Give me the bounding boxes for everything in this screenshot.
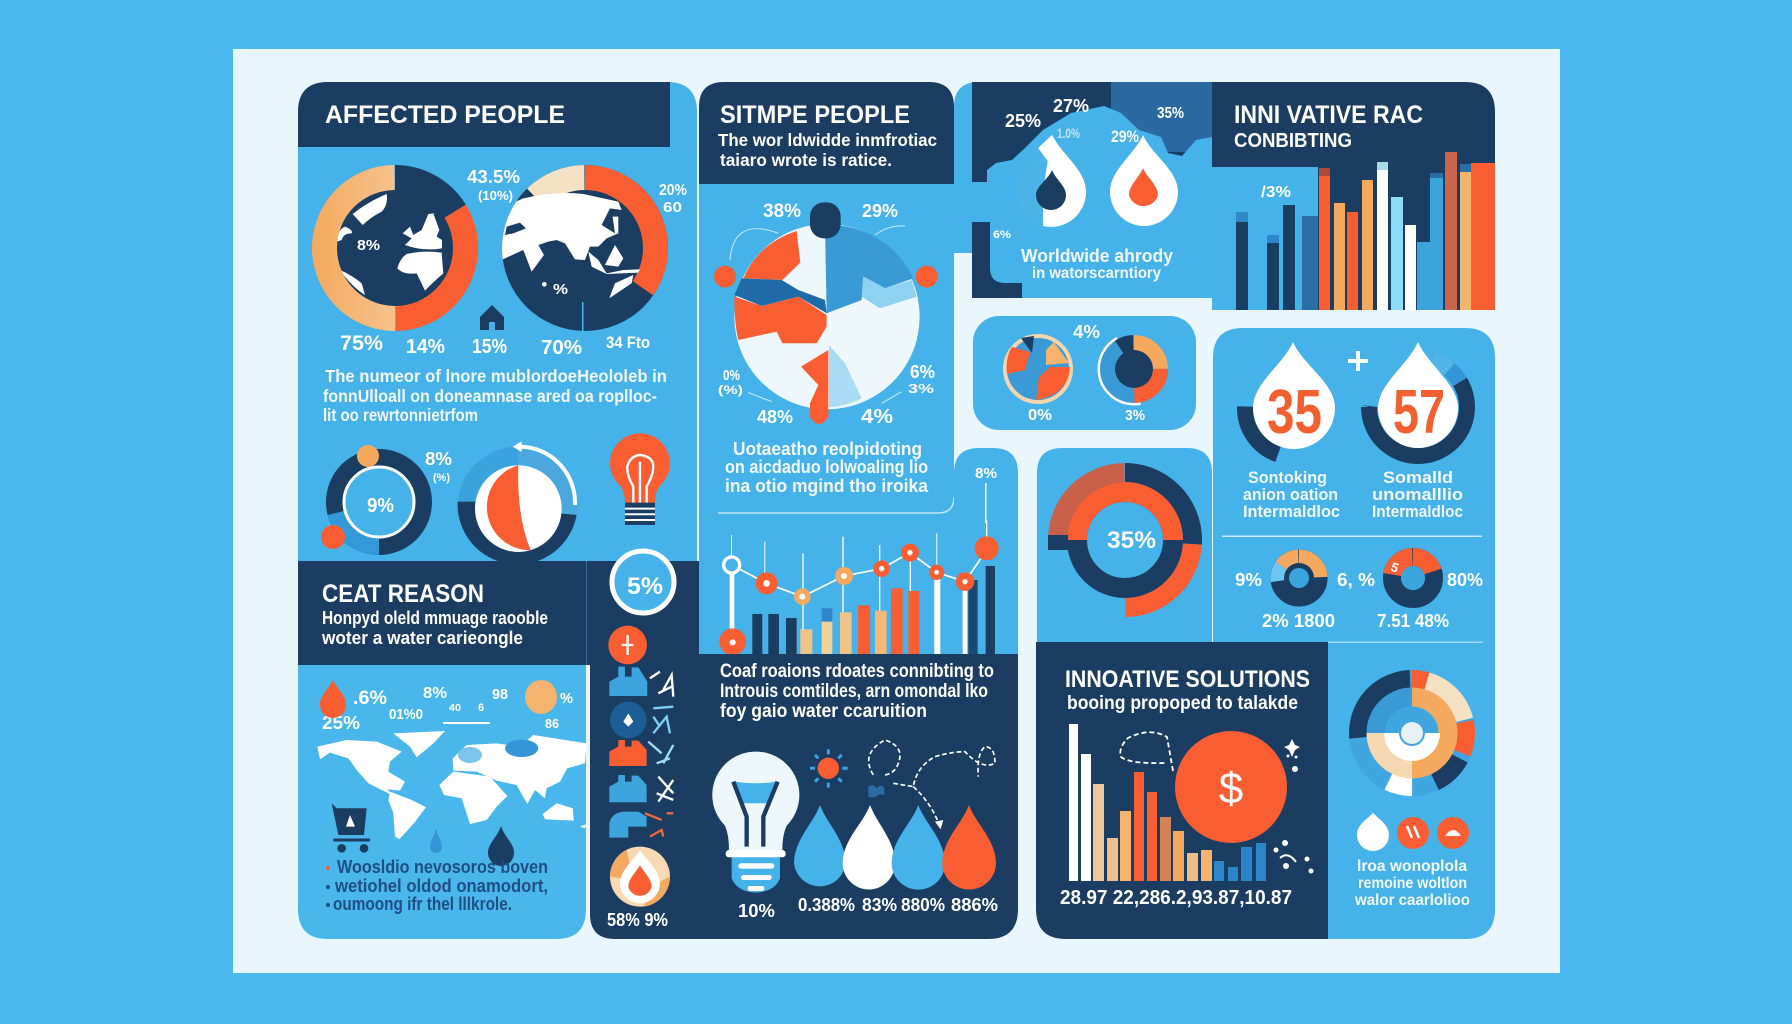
icon: small drops bbox=[430, 826, 514, 866]
labels: drop percentages: 880% bbox=[901, 895, 945, 915]
heading: ceat reason: CEAT REASON bbox=[322, 580, 484, 608]
icon: white and dark drop bbox=[1016, 135, 1088, 227]
icon: house bbox=[480, 305, 504, 330]
labels: map percentages: % bbox=[560, 690, 573, 707]
panel: simple people bbox=[699, 82, 954, 654]
labels: map percentages: 8% bbox=[423, 685, 447, 702]
stat: 57 drop: 57 bbox=[1393, 378, 1445, 447]
labels: drop percentages: 25% bbox=[1005, 111, 1041, 131]
labels: pie percentages: 48% bbox=[757, 407, 793, 427]
chart: ring donut 9%: 8% bbox=[425, 449, 452, 469]
heading: ceat reason: Honpyd oleld mmuage raooble bbox=[322, 607, 548, 628]
icon: sparkle and dots bbox=[1274, 739, 1314, 874]
text block: 57 caption: Intermaldloc bbox=[1372, 503, 1463, 521]
labels: top donut percentages: 70% bbox=[541, 337, 582, 359]
panel: two small pies bbox=[973, 316, 1196, 430]
labels: drop percentages: 35% bbox=[1157, 105, 1184, 122]
chart: small pie left bbox=[1005, 336, 1071, 402]
chart: ring donut 9% bbox=[321, 445, 452, 549]
labels: drop percentages bbox=[738, 895, 998, 921]
label: column percentages: 58% 9% bbox=[607, 910, 668, 930]
panel: tab with 8%: 8% bbox=[975, 465, 997, 482]
page background panel bbox=[233, 49, 1560, 973]
text block: solutions caption bbox=[1354, 858, 1470, 909]
text block: affected description bbox=[323, 366, 667, 425]
labels: drop percentages: 886% bbox=[951, 895, 998, 915]
labels: map percentages: 98 bbox=[492, 686, 508, 703]
stat: 35 drop bbox=[1245, 342, 1343, 457]
labels: drop percentages: 83% bbox=[862, 895, 897, 915]
labels: map percentages: 6 bbox=[478, 702, 484, 714]
labels: top donut percentages: (10%) bbox=[478, 188, 513, 203]
icons: four drops bbox=[794, 805, 996, 890]
labels: small donut values: 9% bbox=[1235, 570, 1262, 590]
icon: dollar coin: $ bbox=[1219, 764, 1243, 813]
labels: map percentages: 86 bbox=[545, 716, 559, 731]
labels: pie percentages: 29% bbox=[862, 201, 898, 221]
badge: 5% ring bbox=[612, 551, 674, 613]
text block: affected description: fonnUlloall on doneamnase ared oa roplloc- bbox=[323, 386, 657, 406]
heading: simple people: taiaro wrote is ratice. bbox=[720, 150, 892, 170]
text block: reason bullets bbox=[326, 857, 548, 914]
labels: pie percentages: 38% bbox=[763, 201, 801, 222]
heading: affected people: AFFECTED PEOPLE bbox=[325, 101, 565, 129]
labels: top donut percentages: 60 bbox=[663, 199, 682, 216]
labels: top donut percentages: 34 Fto bbox=[606, 333, 650, 352]
heading: affected people bbox=[298, 82, 670, 147]
labels: map percentages bbox=[322, 685, 573, 733]
chart: ring donut 9%: 9% bbox=[367, 495, 394, 517]
chart: ring donut 9%: (%) bbox=[433, 472, 450, 484]
labels: top donut percentages: 14% bbox=[406, 336, 445, 358]
chart: small donut right bbox=[1099, 334, 1169, 404]
panel: tab with 8% bbox=[954, 448, 1018, 654]
icon: orange drop bbox=[320, 680, 346, 718]
text block: affected description: lit oo rewrtonnietrfom bbox=[323, 405, 478, 425]
labels: top donut percentages: 15% bbox=[472, 336, 507, 358]
labels: pie percentages bbox=[718, 201, 935, 428]
labels: top donut percentages: 20% bbox=[659, 182, 687, 199]
heading: simple people: SITMPE PEOPLE bbox=[720, 101, 910, 129]
text block: contributing reasons: Introuis comtildes, arn omondal lko bbox=[720, 681, 988, 702]
text block: pie description bbox=[725, 438, 929, 496]
labels: drop percentages: 10% bbox=[738, 901, 775, 921]
stat: 35 drop: 35 bbox=[1267, 378, 1322, 447]
heading: innovative rac bbox=[1234, 101, 1423, 152]
labels: pie percentages: 3% bbox=[908, 381, 935, 396]
chart: globe donut left bbox=[324, 178, 466, 318]
text block: 35 caption: Sontoking bbox=[1248, 469, 1327, 487]
labels: small donut values: 2% 1800 bbox=[1262, 611, 1335, 631]
text block: pie description: on aicdaduo lolwoaling lio bbox=[725, 456, 928, 477]
labels: small donut values: 7.51 48% bbox=[1377, 611, 1449, 631]
chart: globe donut right bbox=[497, 165, 668, 332]
chart: small donut tan bbox=[1279, 558, 1319, 598]
labels: pie percentages: 6% bbox=[910, 362, 935, 382]
chart: 35% multi-ring donut: 35% bbox=[1107, 527, 1156, 554]
labels: small donut values: 6, % bbox=[1337, 570, 1375, 590]
panel: 35 and 57 statistics bbox=[1213, 328, 1495, 939]
chart: small donut orange bbox=[1389, 557, 1434, 599]
icon: sun and dashed arrows bbox=[810, 740, 995, 829]
labels: map percentages: 25% bbox=[322, 713, 360, 733]
text block: contributing reasons: foy gaio water ccaruition bbox=[720, 701, 927, 722]
labels: pie percentages: (%) bbox=[718, 383, 743, 397]
text block: 57 caption: Somalld bbox=[1383, 469, 1453, 487]
panel: innovative solutions bbox=[1036, 642, 1328, 939]
heading: innovative rac: CONBIBTING bbox=[1234, 130, 1352, 152]
labels: drop percentages bbox=[993, 96, 1184, 241]
labels: small pie percentages bbox=[1028, 322, 1145, 424]
icon: tan blob bbox=[525, 680, 557, 714]
text block: solutions caption: lroa wonoplola bbox=[1357, 858, 1467, 875]
text block: pie description: Uotaeatho reolpidoting bbox=[733, 438, 922, 459]
badge: 5% ring: 5% bbox=[627, 573, 663, 600]
text block: worldwide scarcity: Worldwide ahrody bbox=[1021, 246, 1173, 266]
text block: reason bullets: Woosldio nevosoros boven bbox=[337, 857, 548, 877]
icon: white and orange drop bbox=[1110, 135, 1178, 226]
labels: small pie percentages: 4% bbox=[1073, 322, 1100, 342]
icon: dollar coin bbox=[1175, 731, 1287, 843]
icon: plus bbox=[1348, 351, 1368, 371]
icon: dashed thought bubble bbox=[1120, 732, 1173, 771]
chart: 35% multi-ring donut bbox=[1048, 472, 1192, 608]
labels: top donut percentages: 43.5% bbox=[467, 167, 520, 187]
labels: small donut values bbox=[1235, 570, 1483, 631]
labels: top donut percentages: 75% bbox=[340, 332, 383, 355]
labels: drop percentages: 6% bbox=[993, 229, 1011, 241]
panel: 35% donut bbox=[1037, 448, 1212, 642]
text block: 35 caption bbox=[1243, 469, 1340, 521]
text block: contributing reasons bbox=[720, 661, 994, 722]
labels: pie percentages: 4% bbox=[861, 406, 893, 428]
labels: drop percentages: 29% bbox=[1111, 127, 1139, 146]
icon: shopping cart bbox=[332, 803, 370, 853]
text block: solutions caption: walor caarlolioo bbox=[1354, 892, 1470, 909]
text block: 35 caption: Intermaldloc bbox=[1243, 503, 1340, 521]
panel: cause reason bbox=[298, 561, 590, 939]
chart: globe donut right: % bbox=[553, 281, 568, 298]
heading: ceat reason: woter a water carieongle bbox=[321, 627, 523, 648]
chart: pie with arrow bbox=[458, 441, 578, 564]
text block: reason bullets: wetiohel oldod onamodort, bbox=[334, 876, 548, 896]
chart: segmented pie bbox=[714, 202, 938, 424]
labels: small pie percentages: 3% bbox=[1125, 407, 1145, 424]
labels: map percentages: 01%0 bbox=[389, 706, 423, 723]
chart: concentric ring pie bbox=[1358, 679, 1466, 787]
text block: worldwide scarcity: in watorscarntiory bbox=[1032, 265, 1161, 282]
stat: 57 drop bbox=[1369, 342, 1467, 456]
heading: innovative rac: INNI VATIVE RAC bbox=[1234, 101, 1423, 129]
labels: top donut percentages bbox=[340, 167, 687, 359]
labels: map percentages: .6% bbox=[353, 688, 387, 709]
labels: solutions values: 28.97 22,286.2,93.87,10.87 bbox=[1060, 887, 1292, 909]
heading: simple people bbox=[699, 82, 954, 184]
chart: line and bar combo bbox=[719, 520, 999, 655]
heading: ceat reason bbox=[298, 561, 590, 665]
icon: orange light bulb bbox=[610, 433, 670, 525]
text block: worldwide scarcity bbox=[1021, 246, 1173, 282]
map: world map bbox=[317, 731, 587, 839]
labels: drop percentages: 27% bbox=[1053, 96, 1089, 116]
heading: simple people: The wor ldwidde inmfrotiac bbox=[718, 130, 937, 150]
panel: icon column bbox=[590, 551, 700, 939]
icon: water bulb bbox=[712, 752, 799, 893]
chart: small donut orange: 5 bbox=[1389, 559, 1401, 576]
labels: drop percentages: 0.388% bbox=[798, 895, 855, 915]
text block: solutions caption: remoine woltlon bbox=[1358, 875, 1467, 892]
heading: innovative solutions bbox=[1065, 666, 1310, 714]
labels: small donut values: 80% bbox=[1447, 570, 1483, 590]
labels: map percentages: 40 bbox=[449, 703, 461, 714]
chart: globe donut left: 8% bbox=[357, 237, 380, 254]
heading: innovative solutions: booing propoped to talakde bbox=[1067, 693, 1298, 714]
text block: contributing reasons: Coaf roaions rdoates connibting to bbox=[720, 661, 994, 682]
text block: 57 caption: unomalllio bbox=[1372, 486, 1463, 504]
text block: 57 caption bbox=[1372, 469, 1463, 521]
text block: 35 caption: anion oation bbox=[1243, 486, 1338, 504]
panel: contributing reasons dark bbox=[699, 654, 1018, 939]
labels: small pie percentages: 0% bbox=[1028, 407, 1052, 424]
chart: solutions bars bbox=[1069, 724, 1266, 881]
heading: innovative solutions: INNOATIVE SOLUTIONS bbox=[1065, 666, 1310, 693]
labels: drop percentages: 1.0% bbox=[1057, 125, 1080, 141]
panel: worldwide drops bbox=[954, 82, 1212, 298]
text block: pie description: ina otio mgind tho iroika bbox=[725, 475, 929, 496]
label: bars percent: /3% bbox=[1261, 184, 1291, 201]
labels: pie percentages: 0% bbox=[723, 367, 740, 384]
text block: affected description: The numeor of lnore mublordoeHeololeb in bbox=[325, 366, 667, 386]
text block: reason bullets: oumoong ifr thel lllkrole. bbox=[333, 894, 512, 914]
icons: drop and two badges bbox=[1357, 813, 1469, 851]
panel: affected people bbox=[298, 82, 697, 564]
chart: vertical bars bbox=[1236, 152, 1495, 310]
panel: innovative bars bbox=[1212, 82, 1495, 310]
icons: column symbols bbox=[608, 626, 673, 907]
